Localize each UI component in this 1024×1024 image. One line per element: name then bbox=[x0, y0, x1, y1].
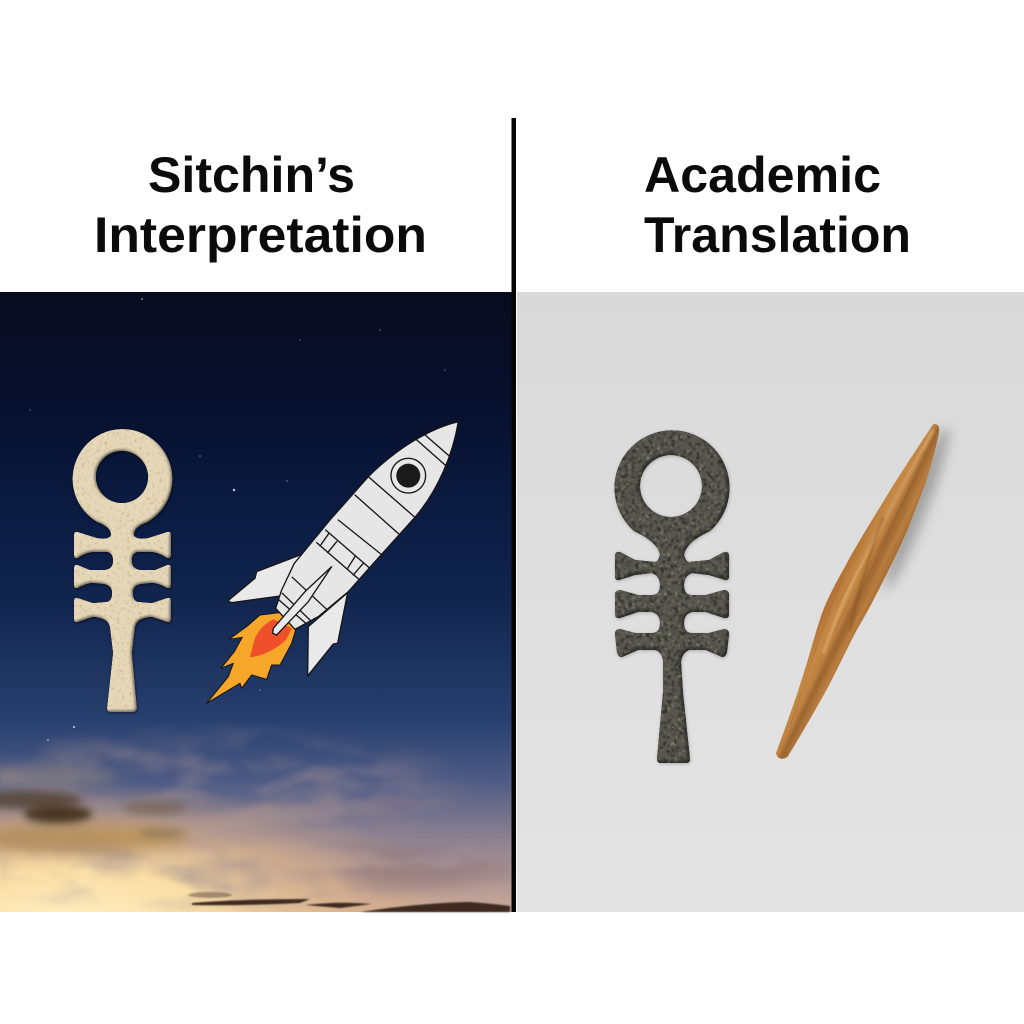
horizon clouds bbox=[188, 892, 510, 912]
panel: neutral grey surface bbox=[517, 292, 1024, 912]
porthole bbox=[391, 458, 426, 493]
icon: light stone artifact bbox=[72, 429, 172, 712]
stars bbox=[29, 298, 446, 741]
spindle shadow bbox=[883, 428, 949, 594]
spindle body bbox=[770, 420, 943, 763]
body bbox=[276, 422, 458, 629]
body bands bbox=[279, 433, 450, 624]
heading: Sitchin's Interpretation bbox=[94, 147, 427, 263]
flame bbox=[207, 613, 297, 703]
comparison infographic bbox=[0, 118, 1024, 914]
heading: Sitchin's Interpretation: Sitchin’s bbox=[148, 147, 355, 203]
centre divider bbox=[512, 118, 516, 912]
heading: Academic Translation: Academic bbox=[644, 147, 881, 203]
panel: night sky with sunset bbox=[0, 292, 513, 912]
heading: Sitchin's Interpretation: Interpretation bbox=[94, 207, 427, 263]
sunset cloud masses bbox=[0, 755, 418, 852]
icon: rocket with flame bbox=[207, 422, 458, 703]
icon: dark stone artifact bbox=[614, 430, 730, 763]
nozzle bbox=[273, 567, 332, 635]
heading: Academic Translation bbox=[644, 147, 911, 263]
fins bbox=[228, 553, 304, 603]
heading: Academic Translation: Translation bbox=[644, 207, 911, 263]
icon: wooden spindle bbox=[770, 420, 949, 763]
